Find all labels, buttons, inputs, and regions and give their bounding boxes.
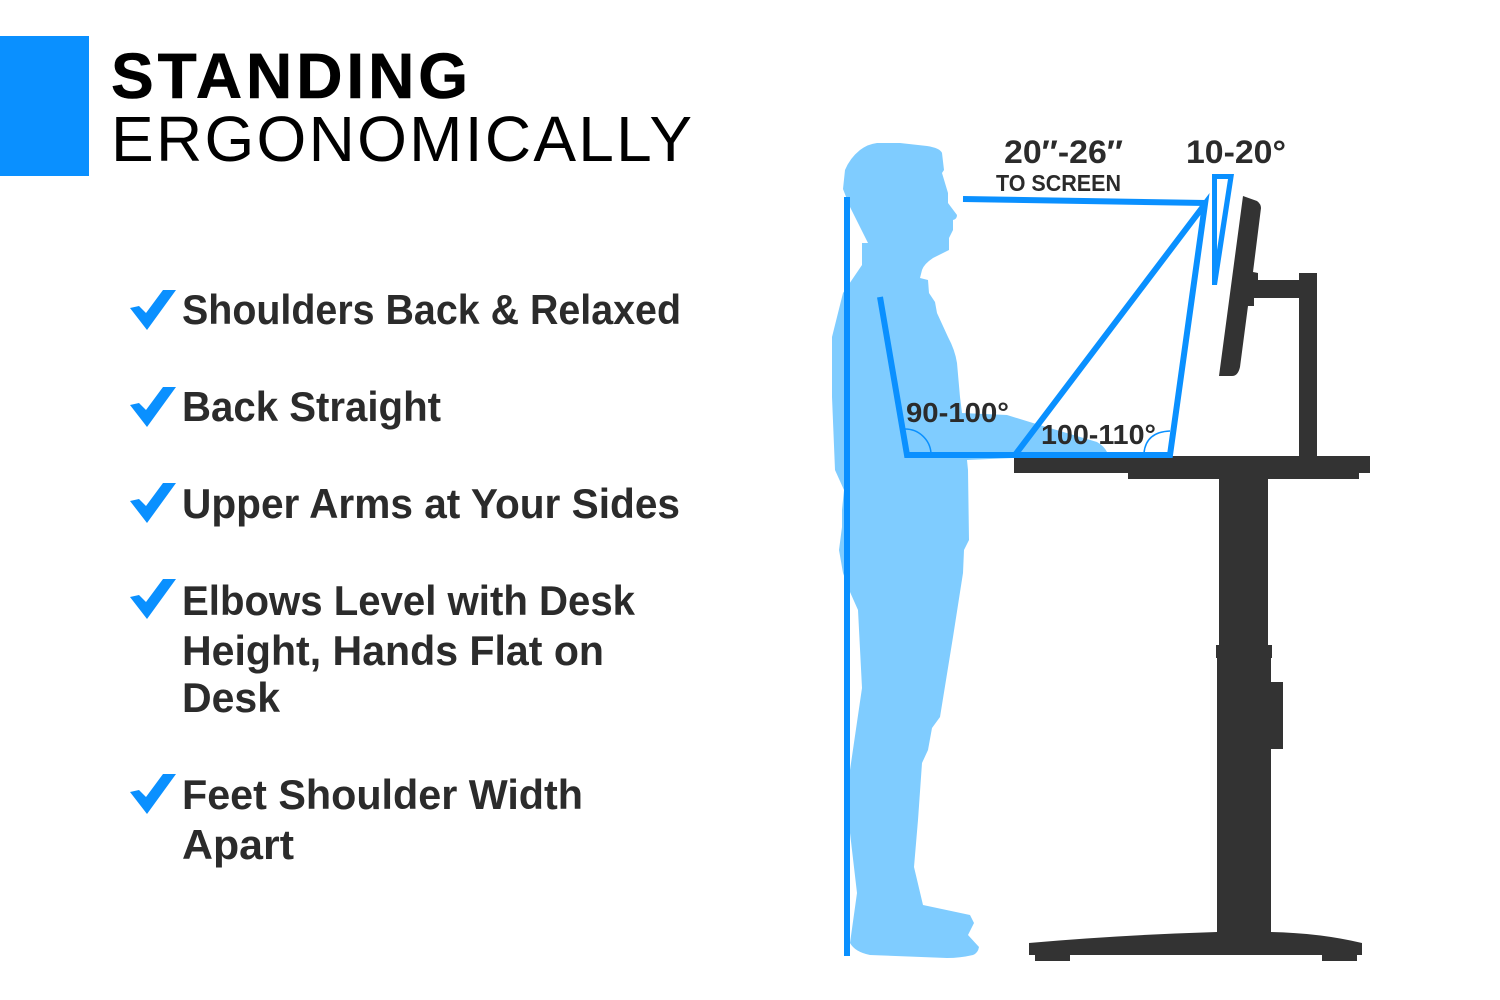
- arm angle line: [880, 204, 1205, 455]
- label: distance: 20″-26″: [1004, 134, 1123, 170]
- title: ERGONOMICALLY: [111, 103, 692, 175]
- checklist: [130, 286, 681, 868]
- monitor and arm: [1219, 196, 1317, 456]
- person silhouette: [832, 143, 1107, 958]
- label: distance: TO SCREEN: [996, 170, 1121, 196]
- item: elbows: Height, Hands Flat on: [182, 627, 604, 674]
- label: distance: [996, 134, 1123, 196]
- elbow arc: [905, 429, 931, 453]
- title: STANDING: [111, 40, 468, 112]
- item: feet: Apart: [182, 821, 294, 868]
- label: screen tilt: 10-20°: [1186, 134, 1286, 170]
- label: viewing angle: 100-110°: [1041, 419, 1156, 450]
- standing desk: [1014, 196, 1370, 961]
- item: elbows: Elbows Level with Desk: [182, 577, 636, 624]
- item: shoulders: Shoulders Back & Relaxed: [182, 286, 681, 333]
- item: upper arms: Upper Arms at Your Sides: [182, 480, 680, 527]
- body vertical line: [844, 197, 850, 956]
- item: feet: [130, 771, 583, 868]
- item: elbows: [130, 577, 636, 721]
- eye line: [963, 199, 1206, 203]
- item: elbows: Desk: [182, 674, 281, 721]
- item: feet: Feet Shoulder Width: [182, 771, 583, 818]
- item: back: Back Straight: [182, 383, 441, 430]
- ergonomic guide lines: [847, 197, 1206, 956]
- screen arc: [1144, 431, 1170, 453]
- header accent square: [0, 36, 89, 176]
- desk top and column: [1014, 456, 1370, 961]
- viewing angle wedge: [1212, 174, 1234, 285]
- label: elbow angle: 90-100°: [906, 397, 1009, 428]
- title: [111, 40, 692, 175]
